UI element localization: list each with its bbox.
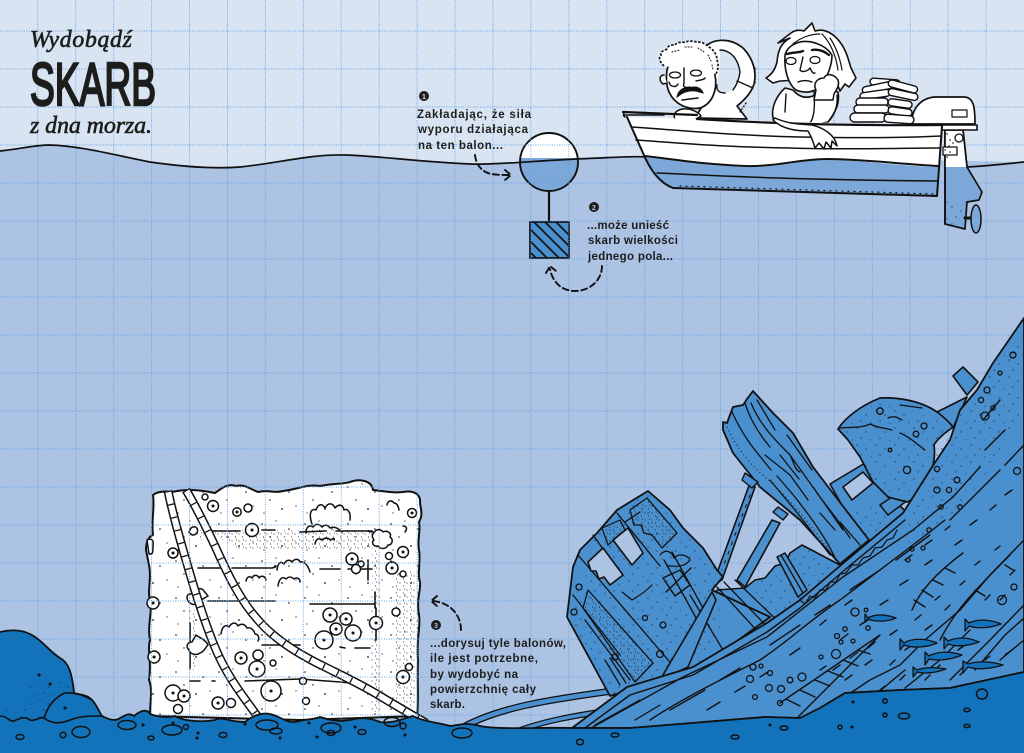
wreck: connector to dome — [937, 397, 967, 428]
treasure block — [146, 480, 426, 723]
number 1: 1 — [422, 94, 426, 101]
step 3 text: skarb. — [430, 699, 465, 711]
woman: hand under chin — [814, 75, 839, 100]
rope right — [186, 490, 426, 723]
number 3: 3 — [434, 623, 438, 630]
boat hull — [623, 112, 942, 196]
step 1 note — [417, 91, 532, 152]
block bubbles — [147, 494, 416, 714]
block cracks — [190, 530, 378, 684]
cabin window left — [588, 548, 623, 585]
wreck: small vent block — [953, 367, 978, 395]
boat with characters — [623, 23, 982, 233]
wreck: struts — [713, 483, 780, 587]
step 3 text: ...dorysuj tyle balonów, — [430, 638, 566, 650]
balloon — [518, 133, 582, 222]
woman: forearm and fingers over hull — [773, 118, 837, 149]
wreck: rear deck section — [830, 463, 910, 550]
hull bubbles — [746, 352, 1020, 706]
outboard motor — [912, 97, 982, 233]
step 3 text: powierzchnię cały — [430, 684, 537, 696]
number 2: 2 — [592, 205, 596, 212]
arrow to square — [546, 266, 602, 291]
title line: SKARB: SKARB — [30, 51, 156, 118]
water surface line — [0, 145, 1024, 168]
woman: face — [785, 42, 832, 92]
wreck: ropes on seabed — [458, 690, 625, 732]
step 2 text: ...może unieść — [587, 220, 670, 232]
stippled shading on block — [188, 530, 420, 712]
seabed pebbles — [16, 689, 988, 745]
step 1 text: Zakładając, że siła — [417, 109, 532, 121]
title line: Wydobądź: Wydobądź — [30, 27, 133, 53]
woman: torso — [773, 88, 839, 126]
wreck: diagonal beam — [660, 592, 716, 680]
wreck: main hull — [572, 318, 1024, 728]
hull ladders and planks — [780, 553, 1013, 717]
title line: z dna morza: z dna morza. — [29, 113, 152, 139]
wreck: dome — [838, 398, 953, 502]
block shrubs — [221, 501, 406, 641]
title — [29, 27, 156, 139]
man: head — [666, 52, 716, 108]
arrow to balloon — [475, 155, 511, 180]
rope left — [168, 491, 258, 717]
wreck: rear box — [880, 490, 908, 515]
stack of pillows — [850, 78, 919, 124]
woman — [766, 23, 856, 126]
wreck: tall timber — [723, 391, 869, 564]
step 1 text: na ten balon... — [418, 140, 503, 152]
woman: hair back — [766, 23, 856, 91]
cabin window right — [613, 528, 643, 565]
step 3 text: by wydobyć na — [430, 669, 519, 681]
treasure unit square — [530, 222, 570, 258]
seabed — [0, 630, 1024, 753]
wreck: cabin — [567, 491, 785, 696]
fish school — [865, 614, 1003, 677]
arrow to block — [431, 596, 461, 630]
step 1 text: wyporu działająca — [417, 124, 529, 136]
step 2 text: skarb wielkości — [588, 235, 678, 247]
man — [660, 40, 755, 126]
step 3 note — [430, 620, 566, 711]
man: hand on rail — [674, 109, 701, 126]
block barnacle flowers — [147, 527, 392, 654]
man: face — [670, 72, 680, 78]
stippled panels — [630, 498, 677, 548]
step 2 text: jednego pola... — [587, 251, 673, 263]
wreck: deck pillar — [777, 553, 807, 597]
wreck: lower deck under timber — [700, 545, 880, 670]
shipwreck — [458, 318, 1024, 732]
man: arm and body — [695, 40, 755, 119]
wreck: rear window — [843, 472, 873, 500]
step 2 note — [587, 202, 678, 263]
step 3 text: ile jest potrzebne, — [430, 653, 538, 665]
